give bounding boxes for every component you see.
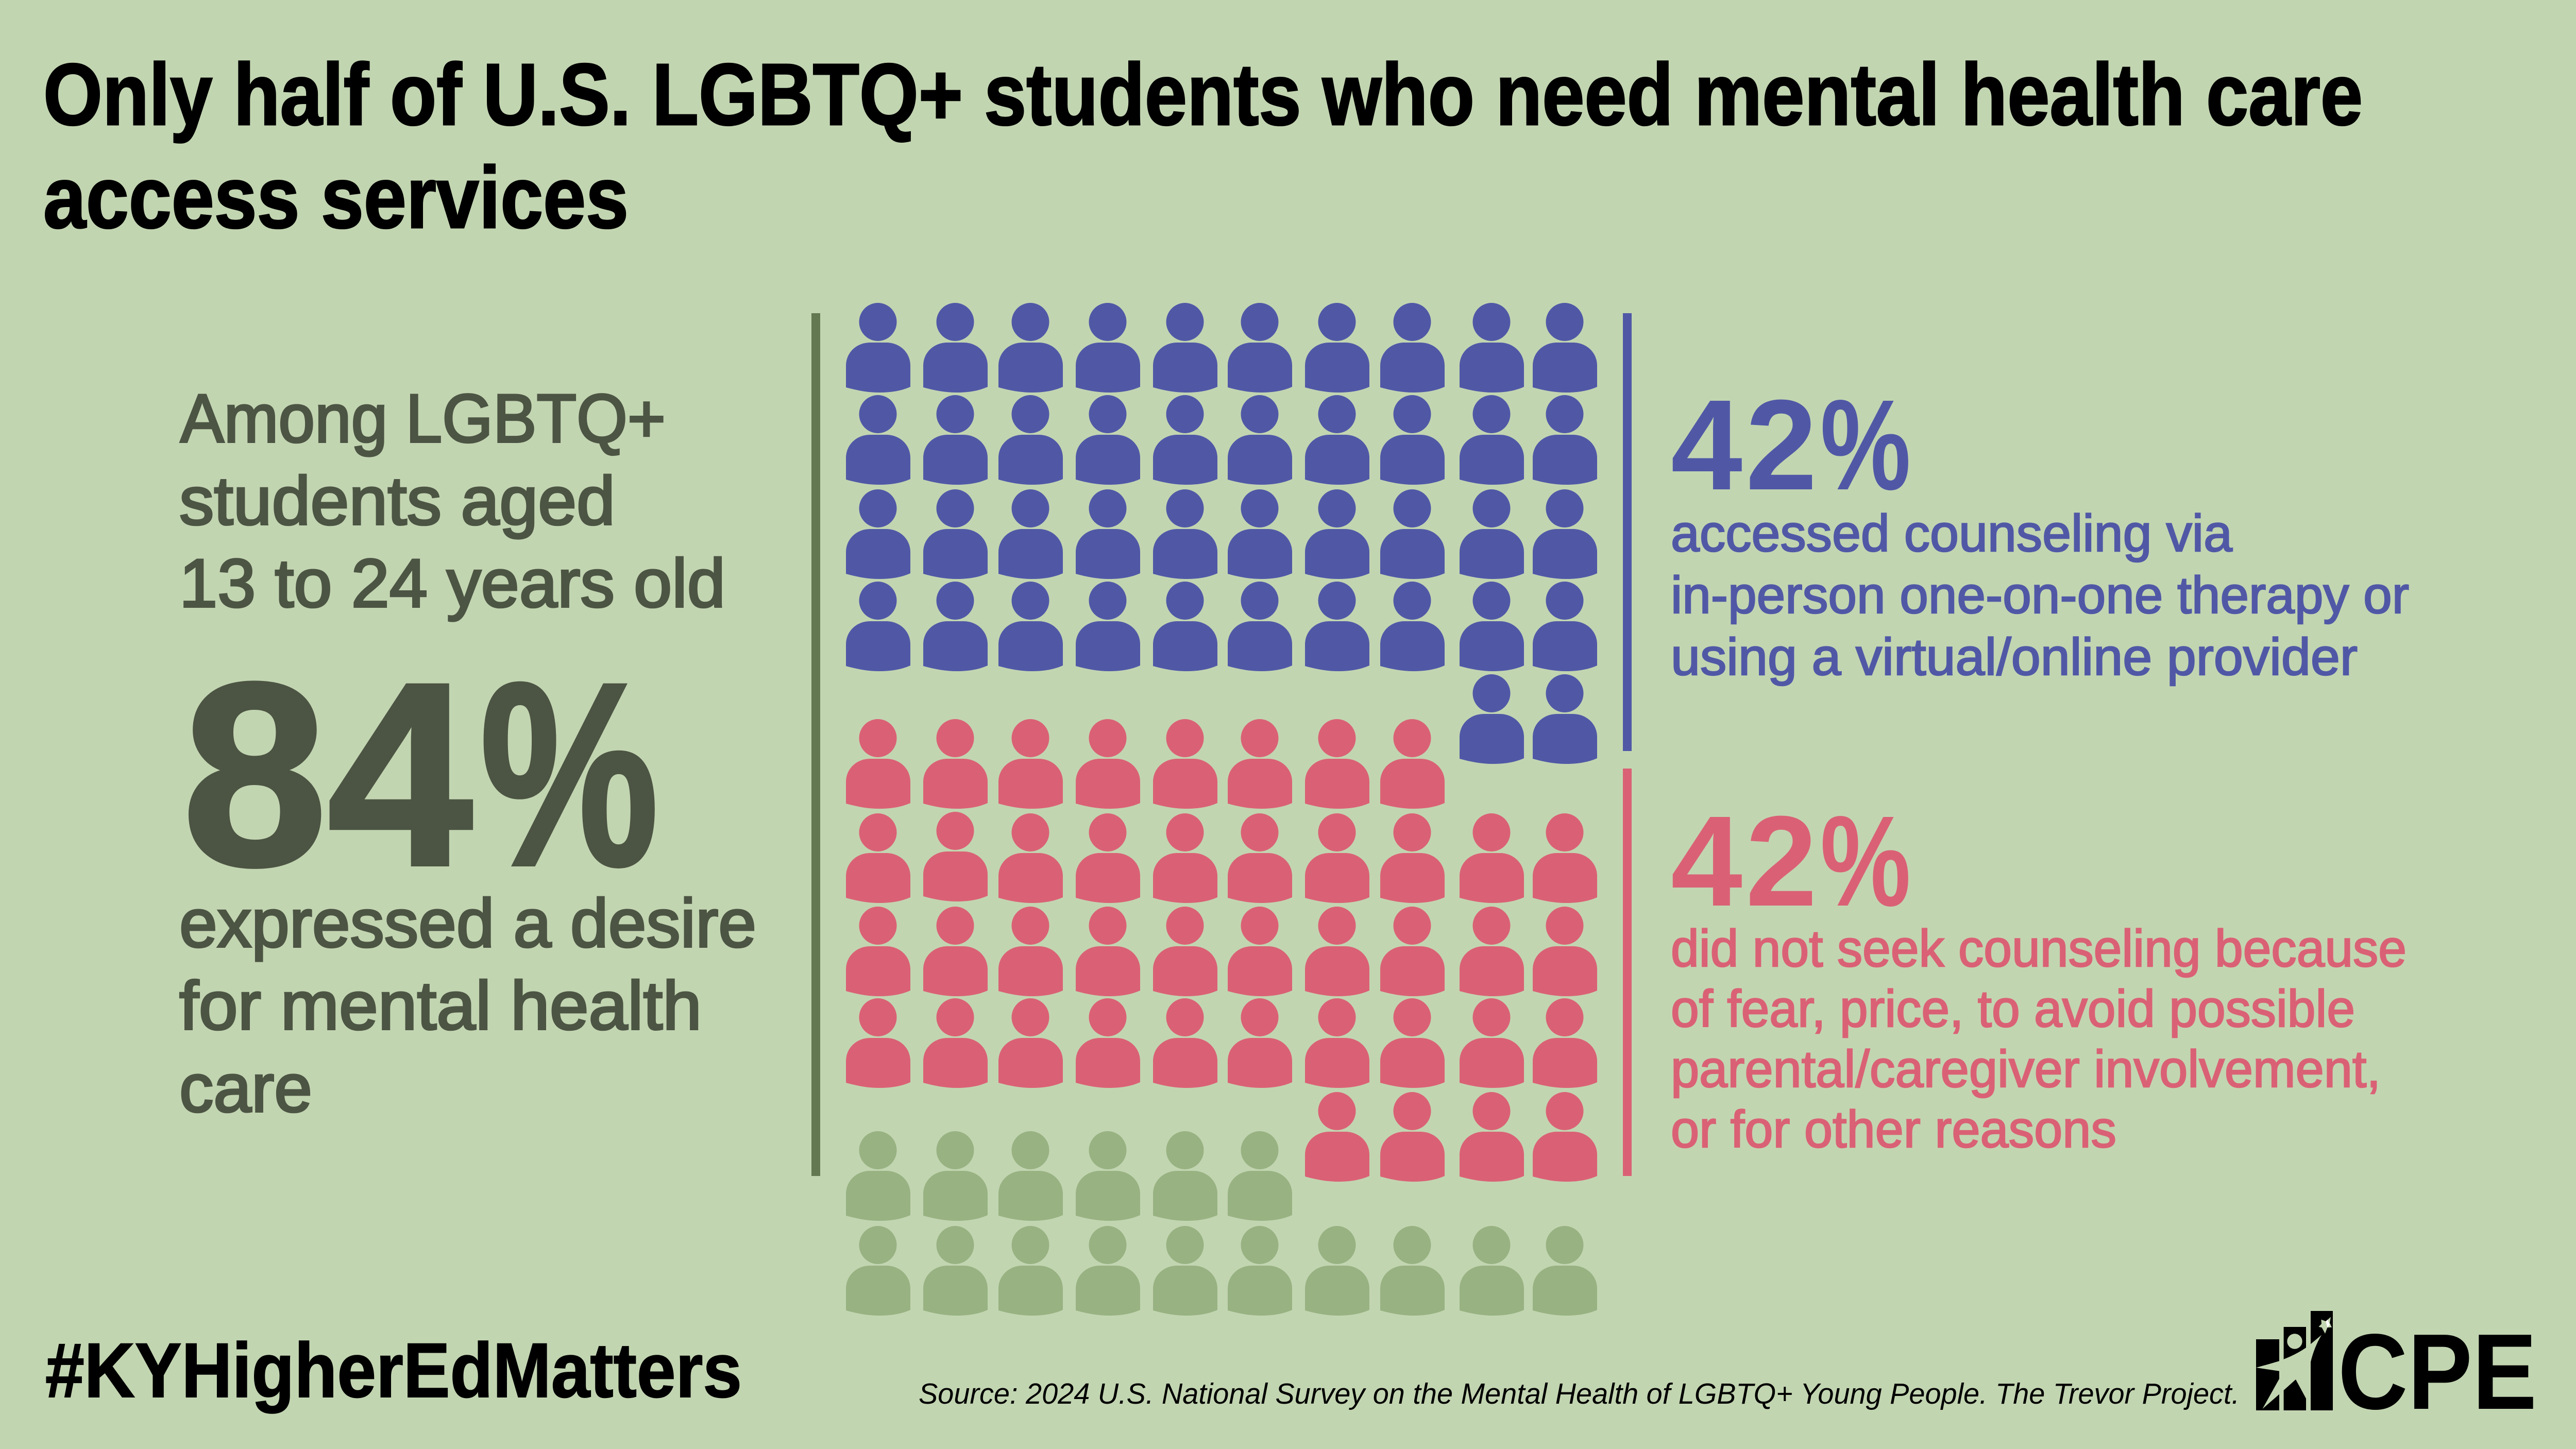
text: desire: expressed a desire: [179, 885, 756, 962]
icon: bars with star figure: [2256, 1311, 2333, 1410]
text: intro: Among LGBTQ+: [180, 381, 666, 457]
pictogram: 42 blue people: [846, 303, 1597, 764]
panel: left statement: [179, 381, 756, 1127]
text: accessed counseling: [1671, 505, 2409, 686]
stat: 42% accessed: 42: [1671, 373, 1817, 517]
logo: CPE: [2256, 1311, 2537, 1432]
panel: blue statistic: [1671, 373, 2409, 686]
bracket: red bar: [1623, 769, 1632, 1176]
stat: 42% accessed: %: [1820, 373, 1911, 517]
bracket: 84% bar: [811, 313, 820, 1176]
text: did not seek counseling: of fear, price, to avoid possible: [1671, 980, 2355, 1038]
stat: 42% did not seek: [1671, 789, 1911, 933]
text: accessed counseling: using a virtual/online provider: [1671, 628, 2358, 686]
stat: 42% accessed: [1671, 373, 1911, 517]
stat: 42% did not seek: %: [1820, 789, 1911, 933]
text: accessed counseling: accessed counseling via: [1671, 505, 2233, 562]
hashtag: #KYHigherEdMatters: [45, 1327, 742, 1413]
title: [43, 46, 2363, 247]
text: desire: care: [179, 1050, 312, 1127]
text: desire: [179, 885, 756, 1127]
bracket: blue bar: [1623, 313, 1632, 751]
text: did not seek counseling: or for other reasons: [1671, 1101, 2116, 1158]
text: intro: [179, 381, 725, 622]
logo wordmark: CPE: [2338, 1312, 2537, 1432]
text: intro: 13 to 24 years old: [179, 545, 725, 622]
text: intro: students aged: [179, 463, 615, 539]
stat: 84%: %: [480, 629, 658, 920]
stat: 42% did not seek: 42: [1671, 789, 1817, 933]
text: did not seek counseling: parental/caregiver involvement,: [1671, 1041, 2381, 1098]
text: desire: for mental health: [179, 968, 702, 1044]
title: access services: [43, 149, 629, 247]
panel: red statistic: [1671, 789, 2406, 1158]
source: Source: 2024 U.S. National Survey on the Mental Health of LGBTQ+ Young People. The Trevor Project.: [919, 1377, 2240, 1410]
pictogram: 42 red people: [846, 719, 1597, 1182]
pictogram: 16 green people: [846, 1131, 1597, 1316]
text: accessed counseling: in-person one-on-one therapy or: [1671, 567, 2409, 624]
stat: 84%: 84: [182, 629, 474, 920]
text: did not seek counseling: did not seek counseling because: [1671, 920, 2406, 978]
stat: 84%: [182, 629, 658, 920]
text: did not seek counseling: [1671, 920, 2406, 1158]
